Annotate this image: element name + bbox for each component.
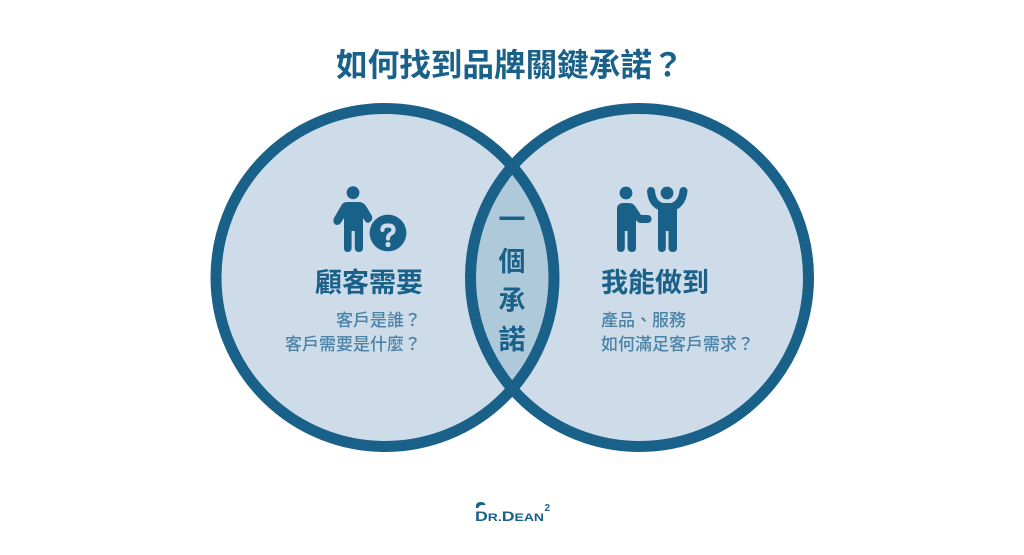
heading: what we can do: 我能做到: [601, 268, 709, 298]
overlap text: one promise: 諾: [498, 325, 526, 355]
logo: Dr.Dean: 2: [544, 503, 550, 514]
venn diagram: [216, 108, 808, 446]
icon: person with question mark: [333, 186, 406, 252]
icon: two people: [617, 187, 684, 252]
logo: Dr.Dean: [475, 502, 550, 524]
heading: customer needs: 顧客需要: [315, 268, 423, 298]
overlap text: one promise: [498, 205, 526, 355]
logo: Dr.Dean: DR.DEAN: [475, 508, 544, 524]
text: customer questions: 客戶需要是什麼？: [285, 334, 421, 354]
right circle: what we can do: [470, 108, 808, 446]
circle outlines: [216, 108, 808, 446]
overlap text: one promise: 個: [498, 247, 526, 277]
title: 如何找到品牌關鍵承諾？: [336, 47, 684, 83]
text: product and service questions: 產品、服務: [601, 310, 686, 330]
overlap lens: [476, 175, 548, 380]
overlap text: one promise: 承: [498, 286, 526, 316]
text: product and service questions: [601, 310, 754, 354]
left circle: customer needs: [216, 108, 554, 446]
text: product and service questions: 如何滿足客戶需求？: [601, 334, 754, 354]
overlap text: one promise: 一: [498, 205, 526, 235]
text: customer questions: [285, 310, 421, 354]
text: customer questions: 客戶是誰？: [336, 310, 421, 330]
